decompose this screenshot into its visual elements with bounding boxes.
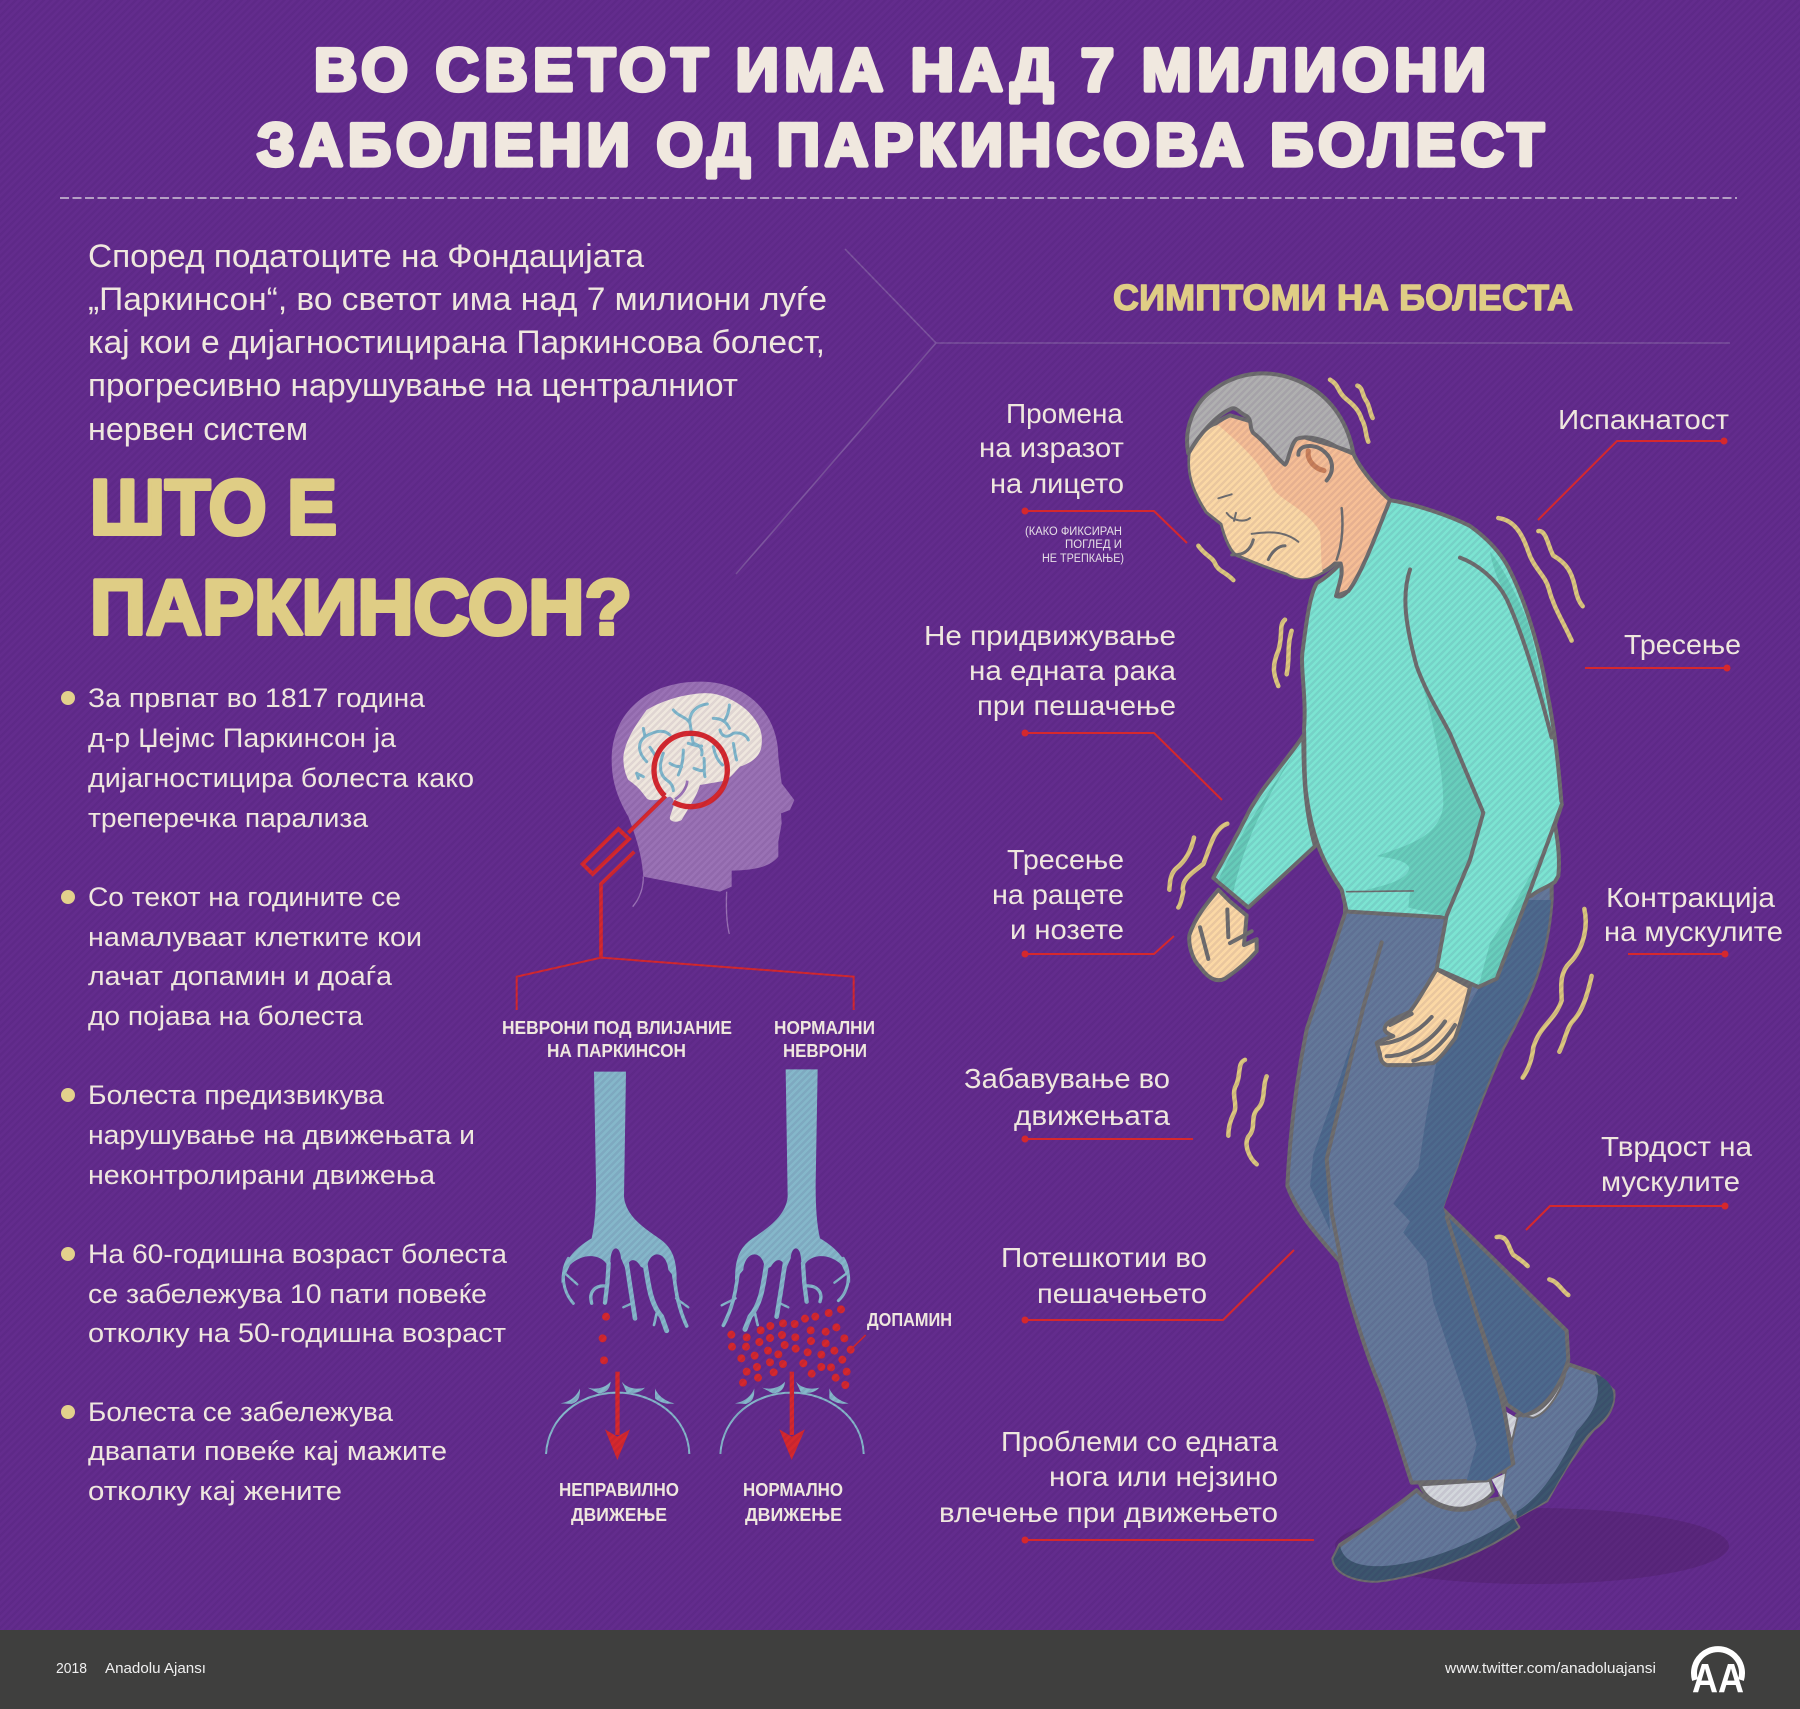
floor shadow xyxy=(1335,1508,1729,1584)
callout: walking difficulty: пешачењето xyxy=(1037,1278,1207,1309)
neuron: normal xyxy=(722,1069,850,1329)
neuron labels: НЕВРОНИ xyxy=(783,1040,867,1061)
receptor: normal xyxy=(720,1382,864,1454)
callout: facial expression: НЕ ТРЕПКАЊЕ) xyxy=(1042,553,1124,565)
heading: what is Parkinson: ПАРКИНСОН? xyxy=(90,563,632,651)
callout: slowed movement: движењата xyxy=(1014,1100,1170,1131)
bullet list: неконтролирани движења xyxy=(88,1160,436,1190)
callout: arm not moving: на едната рака xyxy=(969,655,1176,686)
movement labels: ДВИЖЕЊЕ xyxy=(745,1504,842,1525)
bullet list: Болеста предизвикува xyxy=(88,1080,385,1110)
callout: shaking hands and legs: Тресење xyxy=(1007,844,1124,875)
movement labels: НОРМАЛНО xyxy=(743,1479,843,1500)
callout: hunched back: Испакнатост xyxy=(1558,404,1729,435)
movement labels: НЕПРАВИЛНО xyxy=(559,1479,679,1500)
heading: what is Parkinson xyxy=(90,463,632,651)
bullet list: За првпат во 1817 година xyxy=(88,683,426,713)
callout: leg dragging xyxy=(939,1426,1314,1544)
callout: shaking: Тресење xyxy=(1624,629,1741,660)
callout: muscle contraction: Контракција xyxy=(1606,882,1775,913)
callout: facial expression: ПОГЛЕД И xyxy=(1065,539,1122,551)
title: ВО СВЕТОТ ИМА НАД 7 МИЛИОНИ xyxy=(314,36,1486,104)
bullet list: се забележува 10 пати повеќе xyxy=(88,1279,487,1309)
bullet list: двапати повеќе кај мажите xyxy=(88,1436,447,1466)
arrow: abnormal movement xyxy=(605,1372,630,1460)
bullet list: Болеста се забележува xyxy=(88,1397,394,1427)
callout: slowed movement xyxy=(964,1063,1193,1142)
bullet list: до појава на болеста xyxy=(88,1001,364,1031)
callout: arm not moving: Не придвижување xyxy=(924,620,1176,651)
intro text block: нервен систем xyxy=(88,411,308,447)
bullet list: Со текот на годините се xyxy=(88,882,401,912)
bullet list: треперечка парализа xyxy=(88,803,369,833)
callout: slowed movement: Забавување во xyxy=(964,1063,1170,1094)
callout: arm not moving xyxy=(924,620,1222,800)
receptor: affected xyxy=(546,1382,689,1454)
head xyxy=(1187,373,1390,596)
callout: shaking xyxy=(1585,629,1741,672)
intro text block: кај кои е дијагностицирана Паркинсова болест, xyxy=(88,324,825,360)
bullet list: отколку на 50-годишна возраст xyxy=(88,1318,506,1348)
near arm and hand xyxy=(1437,745,1562,987)
callout: hunched back xyxy=(1538,404,1729,520)
far arm and hand xyxy=(1189,736,1315,980)
bullet list: нарушување на движењата и xyxy=(88,1120,475,1150)
intro text block: „Паркинсон“, во светот има над 7 милиони луѓе xyxy=(88,281,827,317)
callout: facial expression: на лицето xyxy=(990,468,1124,499)
title xyxy=(257,36,1544,178)
callout: facial expression: Промена xyxy=(1006,398,1123,429)
symptoms heading: СИМПТОМИ НА БОЛЕСТА xyxy=(1113,277,1573,318)
callout: leg dragging: влечење при движењето xyxy=(939,1497,1278,1528)
footer bar: www.twitter.com/anadoluajansi xyxy=(1444,1661,1656,1677)
callout: leg dragging: нога или нејзино xyxy=(1049,1461,1278,1492)
illustration: walking elderly man xyxy=(1187,373,1614,1581)
callout: muscle contraction: на мускулите xyxy=(1604,916,1783,947)
bullet list: лачат допамин и доаѓа xyxy=(88,961,393,991)
icon: AA logo: AA xyxy=(1692,1655,1744,1701)
bullet list: намалуваат клетките кои xyxy=(88,922,422,952)
neuron labels: НЕВРОНИ ПОД ВЛИЈАНИЕ xyxy=(502,1017,732,1038)
callout: muscle stiffness xyxy=(1526,1131,1752,1230)
dopamine dots: normal xyxy=(727,1305,866,1389)
callout: leg dragging: Проблеми со едната xyxy=(1001,1426,1278,1457)
callout: shaking hands and legs: на рацете xyxy=(992,879,1124,910)
footer bar: Anadolu Ajansı xyxy=(105,1661,206,1677)
neuron: affected by Parkinson xyxy=(561,1072,688,1331)
callout: arm not moving: при пешачење xyxy=(977,690,1176,721)
intro text block: прогресивно нарушување на централниот xyxy=(88,367,738,403)
footer bar: 2018 xyxy=(56,1661,87,1677)
callout: facial expression: (КАКО ФИКСИРАН xyxy=(1025,526,1122,538)
bullet list: дијагностицира болеста како xyxy=(88,763,474,793)
callout: walking difficulty: Потешкотии во xyxy=(1001,1242,1207,1273)
legs and shoes xyxy=(1287,873,1614,1581)
footer bar xyxy=(0,1630,1800,1709)
callout: shaking hands and legs: и нозете xyxy=(1010,914,1124,945)
neuron labels xyxy=(502,1017,875,1061)
dopamine dots: affected xyxy=(599,1313,610,1364)
neuron labels: НА ПАРКИНСОН xyxy=(547,1040,686,1061)
tremor marks xyxy=(1169,380,1592,1295)
icon: head with brain and magnifier xyxy=(517,682,854,1010)
bullet list: На 60-годишна возраст болеста xyxy=(88,1239,508,1269)
movement labels xyxy=(559,1479,843,1525)
bullet list: д-р Џејмс Паркинсон ја xyxy=(88,723,397,753)
callout: shaking hands and legs xyxy=(992,844,1174,958)
dopamine label: ДОПАМИН xyxy=(867,1309,952,1330)
title: ЗАБОЛЕНИ ОД ПАРКИНСОВА БОЛЕСТ xyxy=(257,112,1544,178)
callout: facial expression: на изразот xyxy=(979,432,1124,463)
callout: muscle stiffness: Тврдост на xyxy=(1601,1131,1752,1162)
callout: muscle contraction xyxy=(1604,882,1783,958)
arrow: normal movement xyxy=(779,1372,805,1460)
callout: muscle stiffness: мускулите xyxy=(1601,1166,1740,1197)
movement labels: ДВИЖЕЊЕ xyxy=(571,1504,667,1525)
intro text block: Според податоците на Фондацијата xyxy=(88,238,644,274)
bullet list: отколку кај жените xyxy=(88,1476,342,1506)
intro text block xyxy=(88,238,827,447)
sweater xyxy=(1302,500,1562,917)
callout: walking difficulty xyxy=(1001,1242,1294,1324)
callout: facial expression xyxy=(979,398,1187,565)
bullet list xyxy=(61,683,508,1506)
neuron labels: НОРМАЛНИ xyxy=(774,1017,875,1038)
heading: what is Parkinson: ШТО Е xyxy=(90,463,337,551)
